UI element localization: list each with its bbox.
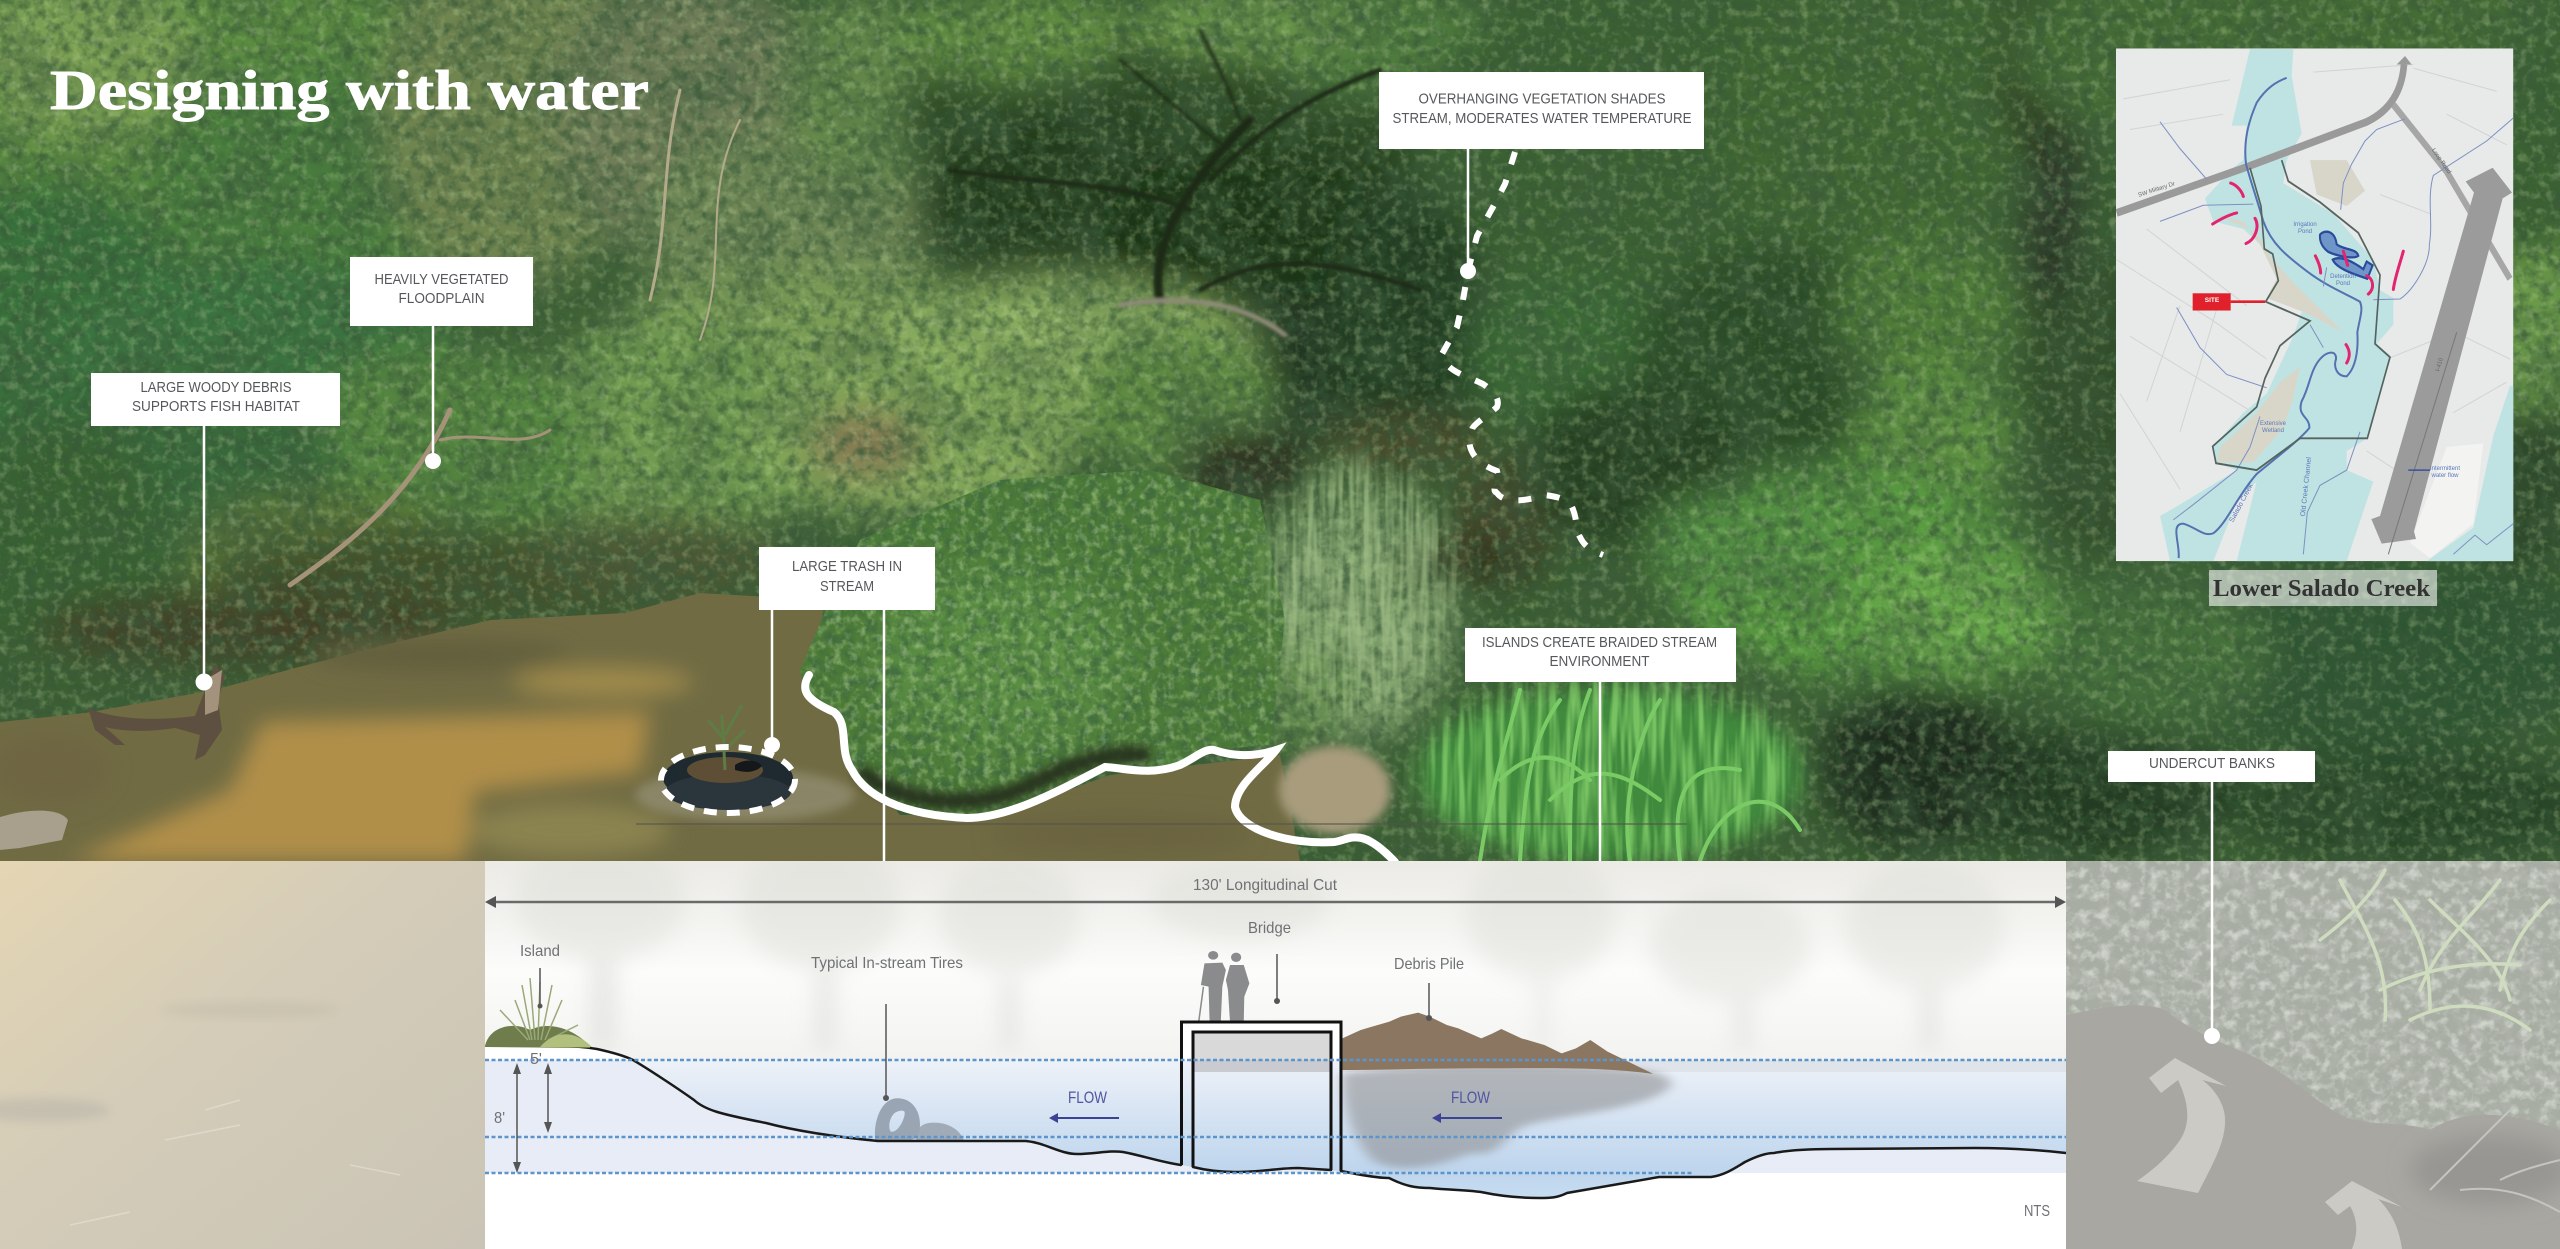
site map: SITE (2205, 297, 2220, 304)
debris pile (1342, 1013, 1671, 1168)
site map (2116, 48, 2513, 561)
label: Typical In-stream Tires (811, 955, 963, 1101)
dimension arrow: 130' longitudinal cut (485, 896, 2066, 908)
flow arrow: under debris (1432, 1088, 1502, 1123)
site map: Wetland (2262, 428, 2284, 434)
tall grass layers (1265, 460, 1800, 865)
site map: Pond (2336, 281, 2350, 287)
pale branches (290, 90, 740, 585)
ponds (2320, 232, 2358, 257)
floodplain (2160, 49, 2393, 561)
dark tree branches (950, 30, 1420, 335)
flow arrow: under debris: FLOW (1451, 1088, 1490, 1107)
terrain line (559, 1046, 2066, 1198)
callout: large woody debris: SUPPORTS FISH HABITAT (132, 398, 300, 415)
woody debris log (88, 665, 225, 760)
roads (2117, 64, 2510, 279)
callout: overhanging vegetation: STREAM, MODERATES WATER TEMPERATURE (1392, 110, 1692, 127)
faint streets (2117, 64, 2510, 489)
photo: creek and vegetation (0, 0, 2560, 865)
label: Island (520, 943, 560, 1008)
callout: heavily vegetated floodplain (350, 257, 533, 469)
callout: islands braided stream (1465, 628, 1736, 861)
callout: overhanging vegetation: OVERHANGING VEGETATION SHADES (1418, 90, 1666, 108)
site map: Detention (2330, 274, 2356, 280)
callout: large woody debris (91, 373, 340, 690)
section title: 130' Longitudinal Cut (1193, 877, 1338, 894)
right strip: washed undercut bank photo (2066, 861, 2560, 1249)
bridge (1182, 1022, 1341, 1171)
island plant (485, 978, 592, 1048)
leaf texture (0, 0, 2560, 861)
water level dotted lines (485, 1060, 2066, 1173)
depth dimension: 8 feet (494, 1063, 521, 1173)
creek channels (2176, 78, 2361, 558)
callout: undercut banks: UNDERCUT BANKS (2149, 755, 2275, 772)
site boundary (2213, 160, 2390, 470)
map caption (2209, 570, 2437, 606)
flow arrows (2137, 1058, 2402, 1249)
callout: large woody debris: LARGE WOODY DEBRIS (140, 379, 292, 396)
misty background trees (515, 840, 2005, 1050)
tires in section (875, 1098, 964, 1141)
site map: I-410 (2435, 357, 2445, 372)
water body (633, 1060, 2066, 1198)
not to scale note: NTS (2024, 1203, 2050, 1220)
water surface (0, 593, 1300, 861)
site map: Salado Creek (2229, 482, 2255, 524)
label: Bridge (1248, 920, 1291, 1004)
panel: longitudinal cross section (485, 840, 2066, 1249)
upland patches (2213, 160, 2365, 462)
tire dashed highlight (661, 747, 795, 813)
title: Designing with water (50, 60, 649, 122)
label: Island: Island (520, 943, 560, 960)
callout: large trash in stream: STREAM (820, 578, 874, 595)
gravel bar (1279, 746, 1391, 834)
callout: heavily vegetated floodplain: FLOODPLAIN (398, 290, 484, 307)
runway (2371, 168, 2512, 544)
map caption: Lower Salado Creek (2213, 576, 2431, 602)
rock (0, 811, 68, 850)
site map: Loop Road (2430, 148, 2452, 175)
callout: overhanging vegetation (1379, 72, 1704, 279)
site map: Extensive (2260, 421, 2287, 427)
depth dimension: 8 feet: 8' (494, 1110, 505, 1127)
label: Bridge: Bridge (1248, 920, 1291, 937)
flow arrow: under trees: FLOW (1068, 1088, 1107, 1107)
pale grass blades (2320, 870, 2550, 1030)
site map: Intermittent (2430, 466, 2460, 472)
pink flow arcs (2213, 183, 2403, 363)
dashed far stream line (1442, 152, 1603, 555)
tire in stream (635, 705, 855, 821)
site map: Pond (2298, 229, 2312, 235)
callout: islands braided stream: ISLANDS CREATE BRAIDED STREAM (1482, 634, 1717, 651)
site map: SW Military Dr (2138, 181, 2176, 199)
callout: large trash in stream (759, 547, 935, 861)
site marker (2193, 293, 2231, 311)
callout: undercut banks (2108, 751, 2315, 1044)
depth dimension: 5 feet: 5' (530, 1051, 542, 1068)
island foliage (800, 470, 1285, 818)
photo cut line (636, 823, 1687, 825)
site map: Irrigation (2293, 222, 2317, 228)
label: Debris Pile: Debris Pile (1394, 956, 1464, 973)
site map: water flow (2430, 473, 2459, 479)
flow arrow: under trees (1049, 1088, 1119, 1123)
left strip: washed water photo (0, 861, 485, 1249)
ground fill below water (485, 1060, 2066, 1173)
foliage colour masses (0, 0, 2560, 865)
callout: large trash in stream: LARGE TRASH IN (792, 558, 902, 575)
people on bridge (1199, 951, 1249, 1022)
callout: islands braided stream: ENVIRONMENT (1550, 653, 1650, 670)
label: Debris Pile (1394, 956, 1464, 1021)
depth dimension: 5 feet (530, 1051, 552, 1133)
river outline: white stream line (805, 675, 1395, 862)
callout: heavily vegetated floodplain: HEAVILY VEGETATED (374, 271, 509, 288)
label: Typical In-stream Tires: Typical In-stream Tires (811, 955, 963, 972)
site map: Old Creek Channel (2300, 456, 2313, 517)
